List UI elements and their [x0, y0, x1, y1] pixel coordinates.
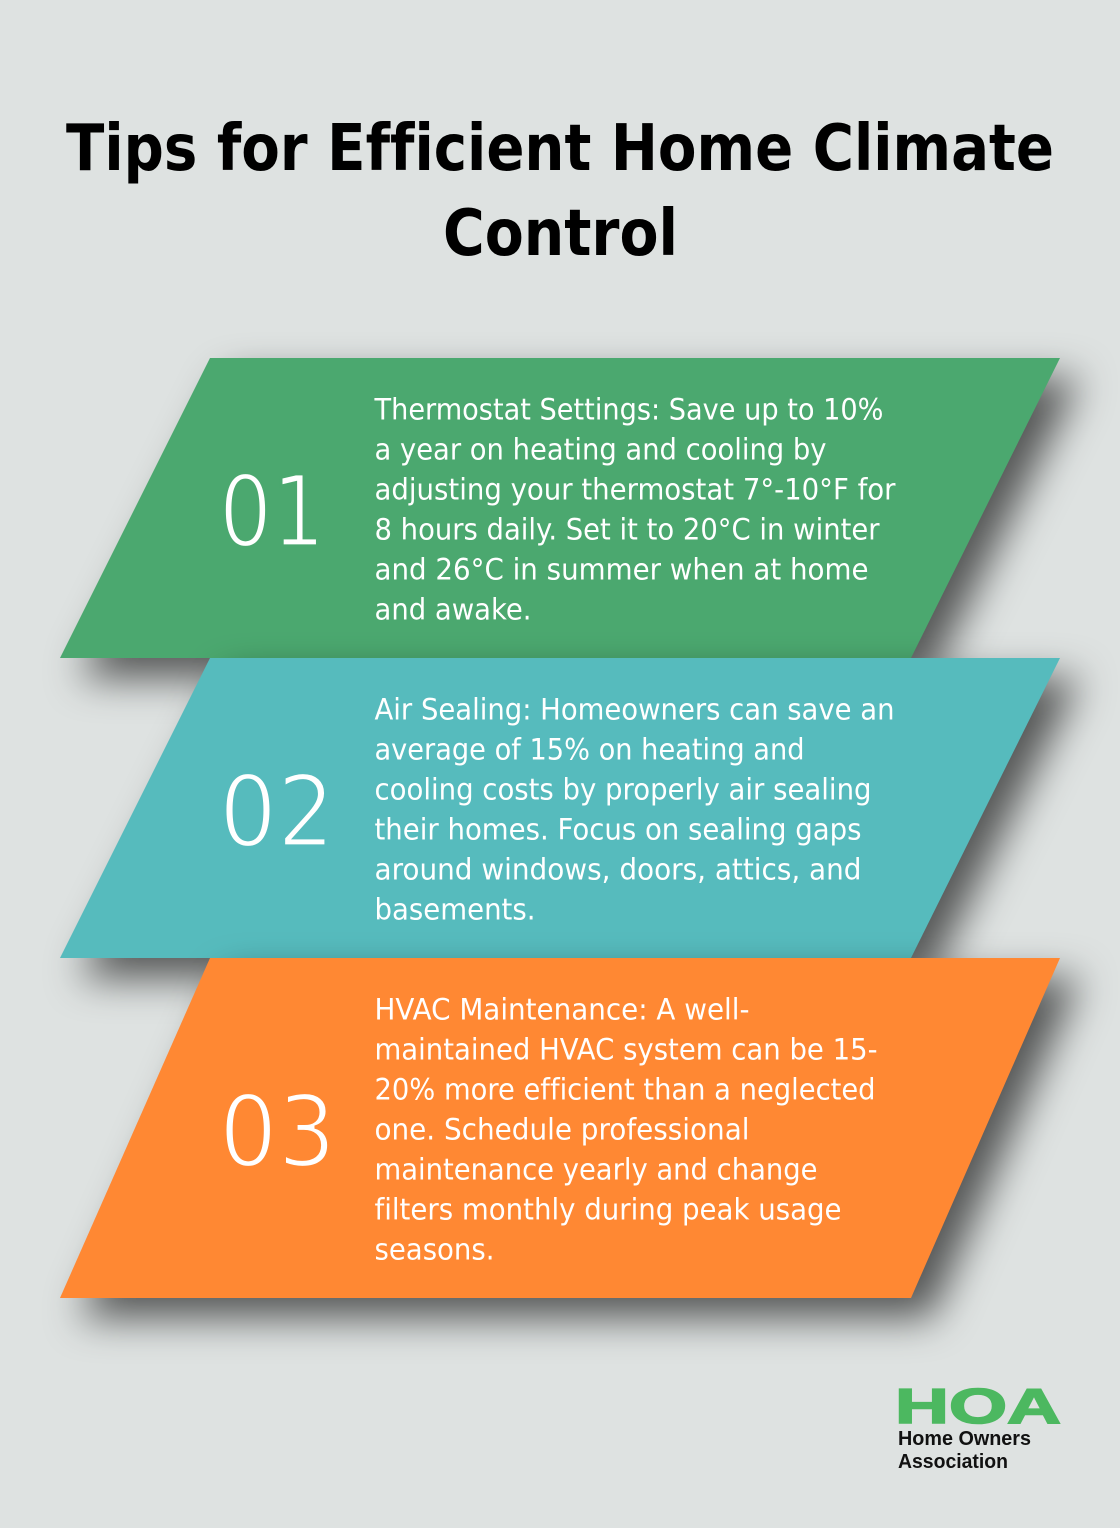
text: air sealing: average of 15% on heating and	[374, 732, 804, 766]
logo: Home Owners Association: Home Owners	[898, 1428, 1031, 1450]
number 02: 02	[219, 755, 335, 870]
text: air sealing: around windows, doors, attics, and	[374, 852, 862, 886]
text: thermostat settings: Thermostat Settings: Save up to 10%	[374, 392, 884, 426]
number 03: 03	[219, 1075, 336, 1190]
panel 02 shape	[60, 658, 1060, 958]
text: HVAC maintenance: filters monthly during peak usage	[374, 1192, 842, 1226]
logo: Home Owners Association	[895, 1380, 1061, 1473]
text: HVAC maintenance: one. Schedule professional	[374, 1112, 750, 1146]
text: air sealing	[374, 692, 894, 926]
panel 03 shadow	[80, 978, 1080, 1318]
text: HVAC maintenance: maintenance yearly and change	[374, 1152, 818, 1186]
text: thermostat settings	[374, 392, 895, 626]
title	[66, 112, 1054, 271]
panel: 02 air sealing	[60, 658, 1080, 978]
text: air sealing: cooling costs by properly air sealing	[374, 772, 872, 806]
text: thermostat settings: 8 hours daily. Set it to 20°C in winter	[374, 512, 880, 546]
text: air sealing: their homes. Focus on sealing gaps	[374, 812, 862, 846]
text: air sealing: Air Sealing: Homeowners can save an	[374, 692, 894, 726]
panel: 01 thermostat settings	[60, 358, 1080, 678]
panel 02 shadow	[80, 678, 1080, 978]
logo: Home Owners Association: Association	[898, 1451, 1008, 1473]
text: HVAC maintenance: 20% more efficient than a neglected	[374, 1072, 876, 1106]
panel 01 shadow	[80, 378, 1080, 678]
text: HVAC maintenance: seasons.	[374, 1232, 494, 1266]
panel 03 shape	[60, 958, 1060, 1298]
panel 01 shape	[60, 358, 1060, 658]
title: Control	[443, 197, 678, 271]
text: thermostat settings: and 26°C in summer when at home	[374, 552, 868, 586]
panel: 03 HVAC maintenance	[60, 958, 1080, 1318]
text: thermostat settings: adjusting your thermostat 7°-10°F for	[374, 472, 896, 506]
text: HVAC maintenance: maintained HVAC system can be 15-	[374, 1032, 878, 1066]
number 01: 01	[219, 455, 325, 570]
text: air sealing: basements.	[374, 892, 536, 926]
text: thermostat settings: and awake.	[374, 592, 532, 626]
text: HVAC maintenance	[374, 992, 878, 1266]
text: thermostat settings: a year on heating and cooling by	[374, 432, 826, 466]
logo: Home Owners Association: HOA	[895, 1380, 1061, 1434]
text: HVAC maintenance: HVAC Maintenance: A well-	[374, 992, 750, 1026]
